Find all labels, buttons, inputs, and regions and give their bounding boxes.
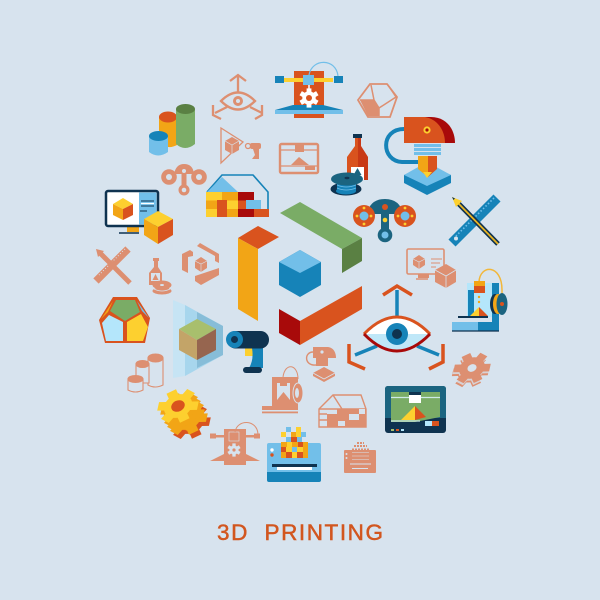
icon: salmon printer screen — [280, 144, 318, 173]
icon: salmon flat printer — [210, 422, 260, 465]
icon: salmon pencil and ruler — [96, 249, 130, 283]
icon: coloured desktop 3D printer — [452, 269, 508, 331]
icon: handheld scanner — [226, 331, 269, 373]
icon: salmon block house — [319, 395, 366, 427]
icon: large eye with axes — [349, 286, 443, 369]
icon: salmon desktop printer — [262, 367, 303, 413]
icon: salmon cube scanner — [221, 128, 261, 163]
icon: coloured caliper — [353, 199, 416, 242]
icon: pixel block printer — [267, 427, 321, 482]
icon: salmon dodecahedron — [358, 84, 397, 117]
icon: filament spool — [330, 172, 363, 196]
icon: salmon cube frame — [182, 243, 219, 285]
central logo: isometric cube frame — [238, 202, 362, 345]
icon: salmon cube monitor — [407, 249, 456, 288]
icon: top 3D printer — [275, 62, 343, 118]
logo: orange bottom bar — [279, 286, 362, 345]
icon: salmon nozzle — [307, 347, 336, 382]
icon: extruder nozzle with platform — [386, 117, 455, 195]
icon: coloured dodecahedron — [99, 297, 150, 343]
icon: salmon bottle and spool — [149, 258, 172, 294]
icon: coloured pencil and ruler — [452, 197, 498, 244]
icon: salmon pixel printer — [344, 443, 376, 473]
logo: blue cube — [279, 250, 321, 297]
icon: green tablet printer screen — [385, 386, 446, 433]
logo: green top bar — [280, 202, 362, 273]
icon: coloured block house — [206, 175, 269, 217]
icon: translucent scanned cube — [173, 300, 223, 378]
icon: salmon caliper — [161, 164, 207, 196]
icon: salmon cylinders — [128, 354, 163, 392]
logo: amber left bar — [238, 226, 279, 321]
icon: yellow isometric gear — [152, 383, 216, 445]
icon: salmon eye with axes — [213, 75, 262, 119]
title: 3D PRINTING — [217, 520, 383, 545]
icon: monitor with cube — [106, 191, 173, 244]
icon: coloured cylinders — [149, 104, 195, 156]
icon: salmon gear — [446, 347, 496, 393]
icon: resin bottle — [347, 134, 368, 180]
